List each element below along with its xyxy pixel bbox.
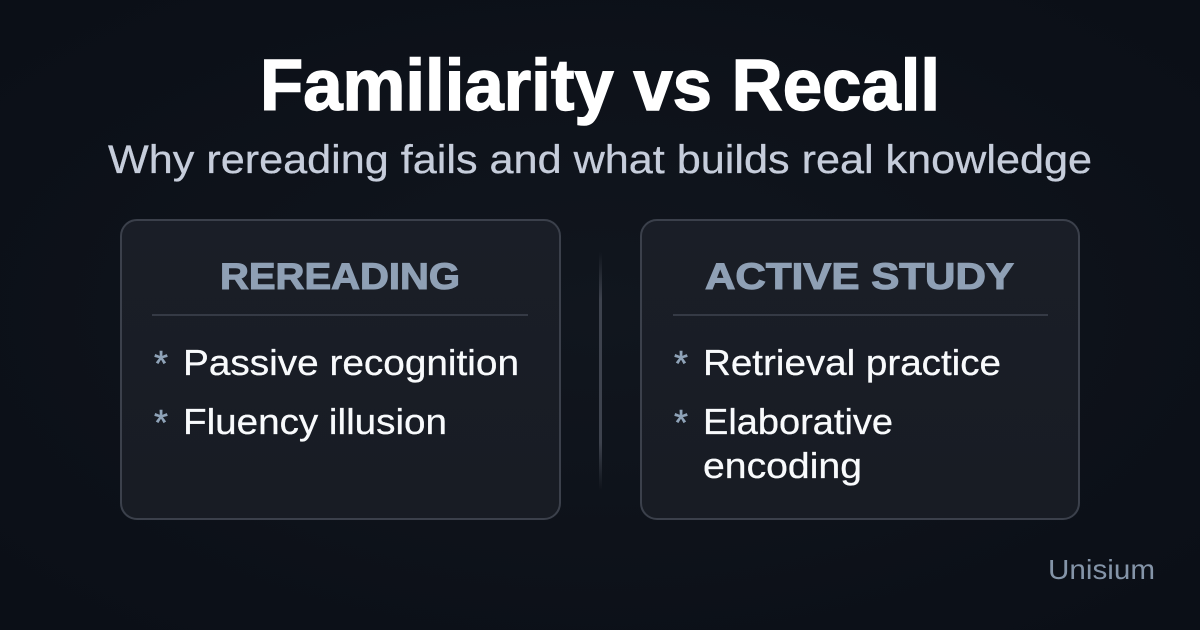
bullet: elaborative encoding: encoding [703,445,862,486]
heading: rereading: REREADING [220,256,460,297]
bullet: fluency illusion: Fluency illusion [183,401,447,442]
panel: active study [641,220,1079,519]
center divider [599,252,602,490]
brand: Unisium: Unisium [1048,554,1155,585]
bullet: passive recognition: * [154,343,168,384]
heading rule [673,314,1048,316]
bullet: retrieval practice: Retrieval practice [703,342,1001,383]
title: Familiarity vs Recall [260,46,940,126]
bullet: elaborative encoding: Elaborative [703,401,893,442]
bullet: passive recognition: Passive recognition [183,342,519,383]
heading: active study: ACTIVE STUDY [705,256,1014,297]
panel: rereading [121,220,560,519]
subtitle: Why rereading fails and what builds real knowledge [108,138,1092,182]
bullet: retrieval practice: * [674,343,688,384]
heading rule [152,314,528,316]
bullet: fluency illusion: * [154,402,168,443]
bullet: elaborative encoding [674,401,893,486]
bullet: elaborative encoding: * [674,402,688,443]
